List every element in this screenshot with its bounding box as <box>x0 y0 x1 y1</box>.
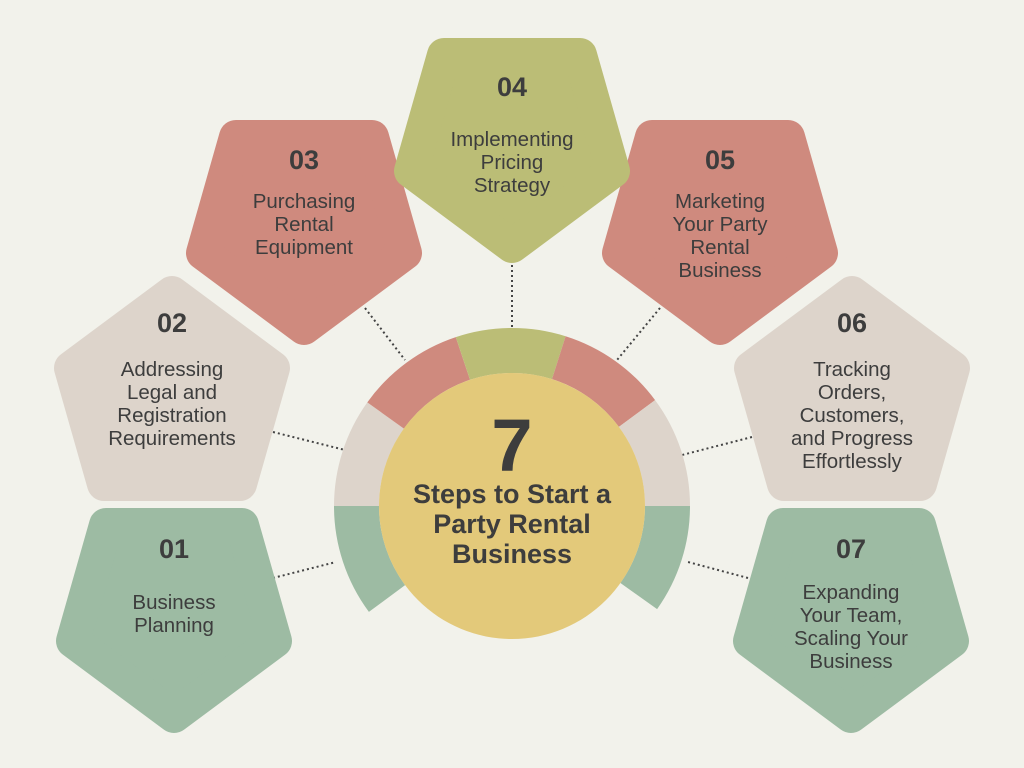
pentagon 01: Planning <box>134 614 214 637</box>
center circle title: 7 <box>491 404 533 487</box>
center circle title <box>379 373 645 639</box>
center circle title: Party Rental <box>433 509 591 539</box>
pentagon 02: Legal and <box>127 381 217 404</box>
center circle title: Steps to Start a <box>413 479 612 509</box>
pentagon 03: Equipment <box>255 236 353 259</box>
pentagon 01: 01 <box>159 534 189 564</box>
pentagon 07: Scaling Your <box>794 627 908 650</box>
pentagon 01 <box>73 525 275 716</box>
pentagon 06: and Progress <box>791 427 913 450</box>
ring segments <box>334 328 690 612</box>
pentagon 07: 07 <box>836 534 866 564</box>
pentagon 04: Strategy <box>474 174 551 197</box>
pentagon 04 <box>411 55 613 246</box>
pentagon 06: Effortlessly <box>802 450 903 473</box>
pentagon 02: Addressing <box>121 358 223 381</box>
pentagon 07 <box>750 525 952 716</box>
pentagon 05: Marketing <box>675 190 765 213</box>
pentagon 03: Purchasing <box>253 190 355 213</box>
pentagon 05 <box>619 137 821 328</box>
pentagon 02: 02 <box>157 308 187 338</box>
pentagon 05: Your Party <box>673 213 768 236</box>
pentagon 02 <box>71 293 273 484</box>
pentagon 07: Business <box>809 650 893 673</box>
pentagon 06 <box>751 293 953 484</box>
pentagon 04: Pricing <box>481 151 543 174</box>
pentagon 05: Rental <box>690 236 750 259</box>
pentagon 03: Rental <box>274 213 334 236</box>
pentagon 06: Orders, <box>818 381 886 404</box>
pentagon 06: Customers, <box>800 404 904 427</box>
pentagon 07: Expanding <box>803 581 899 604</box>
pentagon 04: Implementing <box>450 128 574 151</box>
pentagon 06: 06 <box>837 308 867 338</box>
pentagon 01: Business <box>132 591 216 614</box>
pentagon 02: Registration <box>117 404 227 427</box>
pentagon 05: 05 <box>705 145 735 175</box>
pentagon 02: Requirements <box>108 427 236 450</box>
pentagon 04: 04 <box>497 72 527 102</box>
pentagon 03: 03 <box>289 145 319 175</box>
pentagon 06: Tracking <box>813 358 891 381</box>
pentagon 05: Business <box>678 259 762 282</box>
pentagon 03 <box>203 137 405 328</box>
center circle title: Business <box>452 539 572 569</box>
pentagon 07: Your Team, <box>800 604 902 627</box>
